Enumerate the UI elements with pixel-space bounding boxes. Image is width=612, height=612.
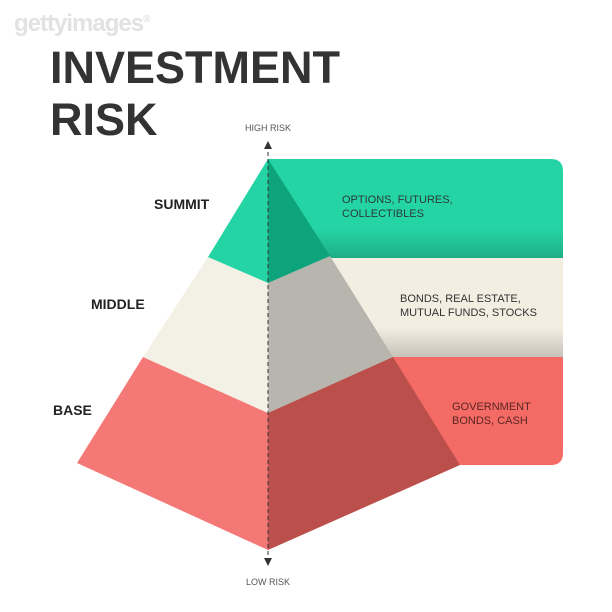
pyramid summit tier <box>208 159 330 283</box>
pyramid base tier <box>77 357 460 550</box>
pyramid diagram: LOW RISK <box>246 577 290 587</box>
pyramid middle tier <box>143 256 393 413</box>
panel: middle: BONDS, REAL ESTATE, <box>400 293 521 305</box>
pyramid diagram: SUMMIT <box>154 196 210 212</box>
pyramid diagram: BASE <box>53 402 92 418</box>
panel: summit <box>268 159 563 258</box>
title <box>50 42 340 145</box>
labels: HIGH RISK <box>245 123 291 133</box>
panel: middle: MUTUAL FUNDS, STOCKS <box>400 307 537 319</box>
panel: base: GOVERNMENT <box>452 401 531 413</box>
title: RISK <box>50 94 158 145</box>
panel: base <box>268 357 563 465</box>
panel: base: BONDS, CASH <box>452 415 528 427</box>
pyramid diagram: MIDDLE <box>91 296 145 312</box>
panel: middle <box>268 258 563 357</box>
axis arrow <box>264 141 272 566</box>
title: INVESTMENT <box>50 42 340 93</box>
panel: summit: OPTIONS, FUTURES, <box>342 194 453 206</box>
watermark: gettyimages® <box>14 10 149 37</box>
panel: summit: COLLECTIBLES <box>342 208 424 220</box>
